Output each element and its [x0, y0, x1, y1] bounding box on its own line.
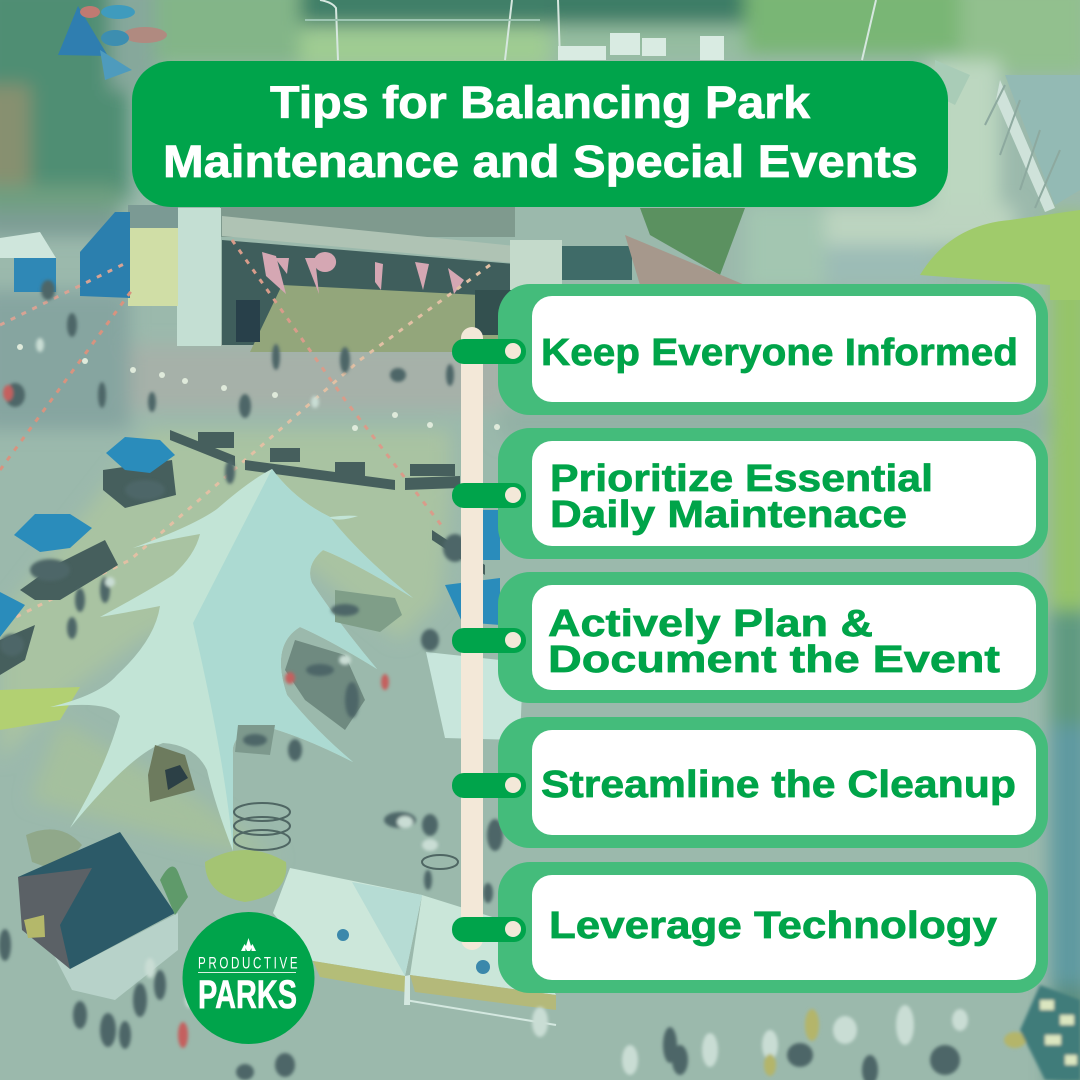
- card 5: Leverage Technology: Leverage Technology: [549, 905, 997, 947]
- white branded canopies: [273, 652, 556, 1025]
- title text: Tips for Balancing Park: [270, 77, 811, 128]
- card 4: Streamline the Cleanup: Streamline the Cleanup: [541, 764, 1016, 806]
- top vans: [558, 33, 724, 60]
- stage: [0, 205, 745, 352]
- logo: Productive Parks: PRODUCTIVE: [198, 954, 300, 973]
- card 2: Prioritize Essential Daily Maintenace: [452, 428, 1048, 559]
- card 4: Streamline the Cleanup: [452, 717, 1048, 848]
- title banner: [132, 61, 948, 207]
- benches and tables: [0, 430, 485, 675]
- card 1: Keep Everyone Informed: Keep Everyone Informed: [541, 332, 1018, 374]
- umbrellas: [0, 437, 500, 637]
- timeline pole: [461, 327, 483, 950]
- bikes: [234, 803, 458, 869]
- title text: [163, 77, 918, 187]
- logo: Productive Parks: [182, 912, 314, 1044]
- card 2: Prioritize Essential Daily Maintenace: Prioritize Essential: [550, 458, 933, 500]
- card 3: Actively Plan and Document the Event: Actively Plan &: [548, 603, 873, 645]
- card 2: Prioritize Essential Daily Maintenace: Daily Maintenace: [550, 494, 907, 536]
- title text: Maintenance and Special Events: [163, 136, 918, 187]
- logo: Productive Parks: PARKS: [198, 973, 297, 1017]
- icon: trees: [241, 938, 256, 951]
- star tent: [50, 469, 413, 851]
- lamp posts and fence: [320, 0, 876, 60]
- card 1: Keep Everyone Informed: [452, 284, 1048, 415]
- picnic people under tent: [148, 590, 402, 802]
- market stall bottom right: [1020, 985, 1080, 1080]
- right shelter: [935, 60, 1080, 212]
- dark canopy: [18, 832, 188, 1000]
- bunting strings: [0, 240, 490, 625]
- crowd of people: [0, 280, 1080, 1080]
- card 5: Leverage Technology: [452, 862, 1048, 993]
- balloons: [17, 344, 500, 431]
- card 3: Actively Plan and Document the Event: Document the Event: [548, 639, 1000, 681]
- patches of grass: [0, 687, 80, 730]
- card 3: Actively Plan and Document the Event: [452, 572, 1048, 703]
- top left festival tents: [58, 5, 167, 80]
